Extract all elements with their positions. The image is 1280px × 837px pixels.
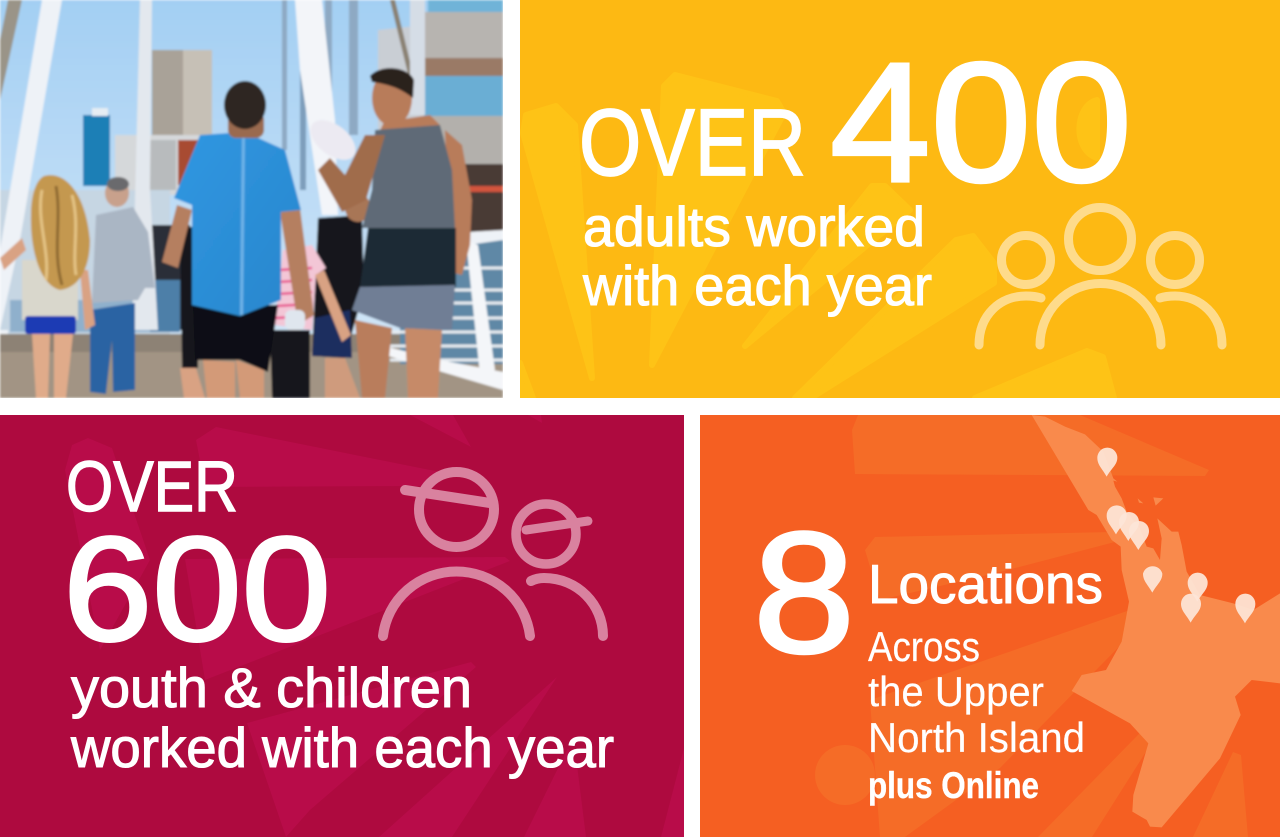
panel: 8 locations — [700, 415, 1280, 837]
text: youth and children worked with each year: worked with each year — [70, 716, 614, 779]
text: adults worked with each year: adults worked — [583, 195, 925, 258]
background rays: crimson — [65, 415, 684, 837]
figure: man in grey tank top holding a ball — [303, 68, 472, 398]
figure: child in black top — [312, 194, 371, 398]
figure: child in pink striped top — [270, 245, 351, 398]
figure: man in blue t-shirt — [162, 81, 314, 398]
text: adults worked with each year: with each year — [582, 254, 932, 317]
panel: over 600 youth and children — [0, 415, 684, 837]
text: youth and children worked with each year: youth & children — [71, 656, 472, 719]
text: across the Upper North Island — [868, 632, 1082, 753]
figure: girl with long hair — [0, 175, 95, 398]
figure: grey hoodie man — [90, 177, 155, 394]
icon: group of three adults — [979, 208, 1222, 345]
background rays: orange — [815, 415, 1248, 837]
text: youth and children worked with each year — [70, 656, 614, 779]
text: plus Online: plus Online — [868, 765, 1039, 806]
text: across the Upper North Island: the Upper — [868, 668, 1044, 715]
number: 8: 8 — [753, 497, 855, 689]
heading: OVER 400 — [582, 60, 1127, 184]
panel: photo of families walking on a bridge — [0, 0, 503, 398]
map: upper North Island of New Zealand — [1032, 415, 1280, 827]
text: across the Upper North Island: Across — [868, 623, 980, 670]
number: 600: 600 — [63, 507, 331, 672]
heading: OVER 400: 400 — [830, 28, 1132, 218]
map pins: eight locations — [1097, 448, 1255, 623]
icon: two children with caps — [383, 472, 603, 636]
heading: OVER: OVER — [66, 448, 238, 527]
text: adults worked with each year — [582, 195, 932, 317]
text: across the Upper North Island: North Island — [868, 714, 1085, 761]
background rays: yellow — [520, 75, 1114, 398]
heading: OVER 400: OVER — [579, 90, 806, 196]
panel: over 400 adults — [520, 0, 1280, 398]
heading: Locations: Locations — [868, 553, 1103, 615]
